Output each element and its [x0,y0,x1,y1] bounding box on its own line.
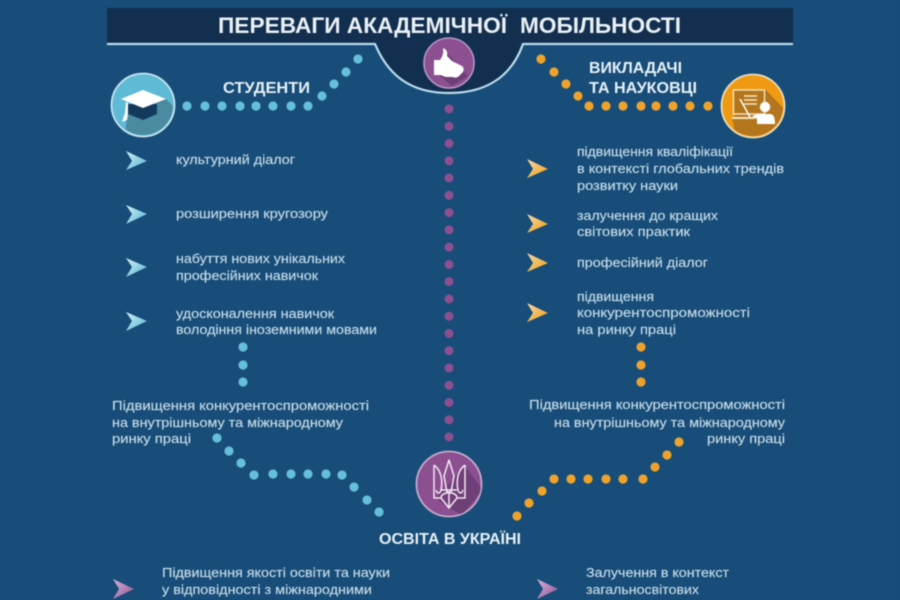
title [218,13,681,38]
item: qualification: в контексті глобальних трендів [577,161,784,176]
text block: bottom right: Залучення в контекст [586,565,729,580]
item: language skills: володіння іноземними мовами [176,322,377,337]
text block: students outcome: Підвищення конкурентоспроможності [112,398,369,413]
item: new skills: професійних навичок [176,268,318,283]
item: best practices: світових практик [577,224,690,239]
arrow bullet: bottom right [537,579,558,599]
icon: thumbs up [424,38,474,88]
icon: trident [416,452,483,516]
item: broadening horizons: розширення кругозору [176,206,329,221]
icon: teacher [722,74,790,140]
title: МОБІЛЬНОСТІ [520,13,681,38]
item: language skills: удосконалення навичок [176,306,334,321]
list: teachers benefits [527,144,784,337]
text block: students outcome: ринку праці [112,431,191,446]
item: new skills: набуття нових унікальних [176,251,346,266]
item: cultural dialogue: культурний діалог [176,152,295,167]
dotted connector: teachers vertical [636,342,646,387]
item: competitiveness [577,289,750,337]
dotted connector: students bottom [212,433,384,517]
arrow bullet [527,303,548,322]
heading: teachers and researchers [589,60,697,97]
text block: students outcome: на внутрішньому та міжнародному [112,415,344,430]
title: ПЕРЕВАГИ АКАДЕМІЧНОЇ [218,13,508,38]
item: competitiveness: конкурентоспроможності [577,305,750,320]
text block: bottom left: у відповідності з міжнародними [162,582,372,597]
dotted connector: students vertical [238,342,248,387]
arrow bullet: bottom left [113,579,134,599]
item: new skills [176,251,346,283]
item: competitiveness: на ринку праці [577,322,676,337]
arrow bullet [527,159,548,178]
arrow bullet [527,214,548,233]
item: professional dialogue: професійний діалог [577,255,708,270]
heading: education in Ukraine: ОСВІТА В УКРАЇНІ [379,531,521,548]
item: language skills [176,306,377,337]
header banner [107,8,793,93]
arrow bullet [527,253,548,272]
dotted connector: students top [182,54,363,111]
item: qualification: розвитку науки [577,178,678,193]
text block: bottom right: загальносвітових [586,582,700,597]
list: students benefits [126,151,377,337]
item: competitiveness: підвищення [577,289,654,304]
item: best practices [577,208,719,239]
heading: teachers and researchers: ВИКЛАДАЧІ [589,60,682,77]
text block: teachers outcome [529,397,786,446]
text block: bottom right [586,565,729,597]
text block: students outcome [112,398,369,446]
text block: bottom left [162,565,390,597]
text block: teachers outcome: на внутрішньому та міжнародному [554,415,786,430]
text block: teachers outcome: ринку праці [707,431,785,446]
text block: bottom left: Підвищення якості освіти та науки [162,565,390,580]
item: best practices: залучення до кращих [577,208,719,223]
arrow bullet [126,151,147,170]
icon: graduation cap [110,72,176,138]
dotted connector: teachers bottom [512,437,684,521]
dotted connector: teachers top [536,54,713,111]
heading: teachers and researchers: ТА НАУКОВЦІ [589,80,697,97]
item: qualification [577,144,784,193]
arrow bullet [126,205,147,224]
heading: students: СТУДЕНТИ [223,80,310,97]
text block: teachers outcome: Підвищення конкурентоспроможності [529,397,785,412]
dotted connector: centre [444,104,454,442]
item: qualification: підвищення кваліфікації [577,144,733,159]
arrow bullet [126,258,147,277]
arrow bullet [126,312,147,331]
